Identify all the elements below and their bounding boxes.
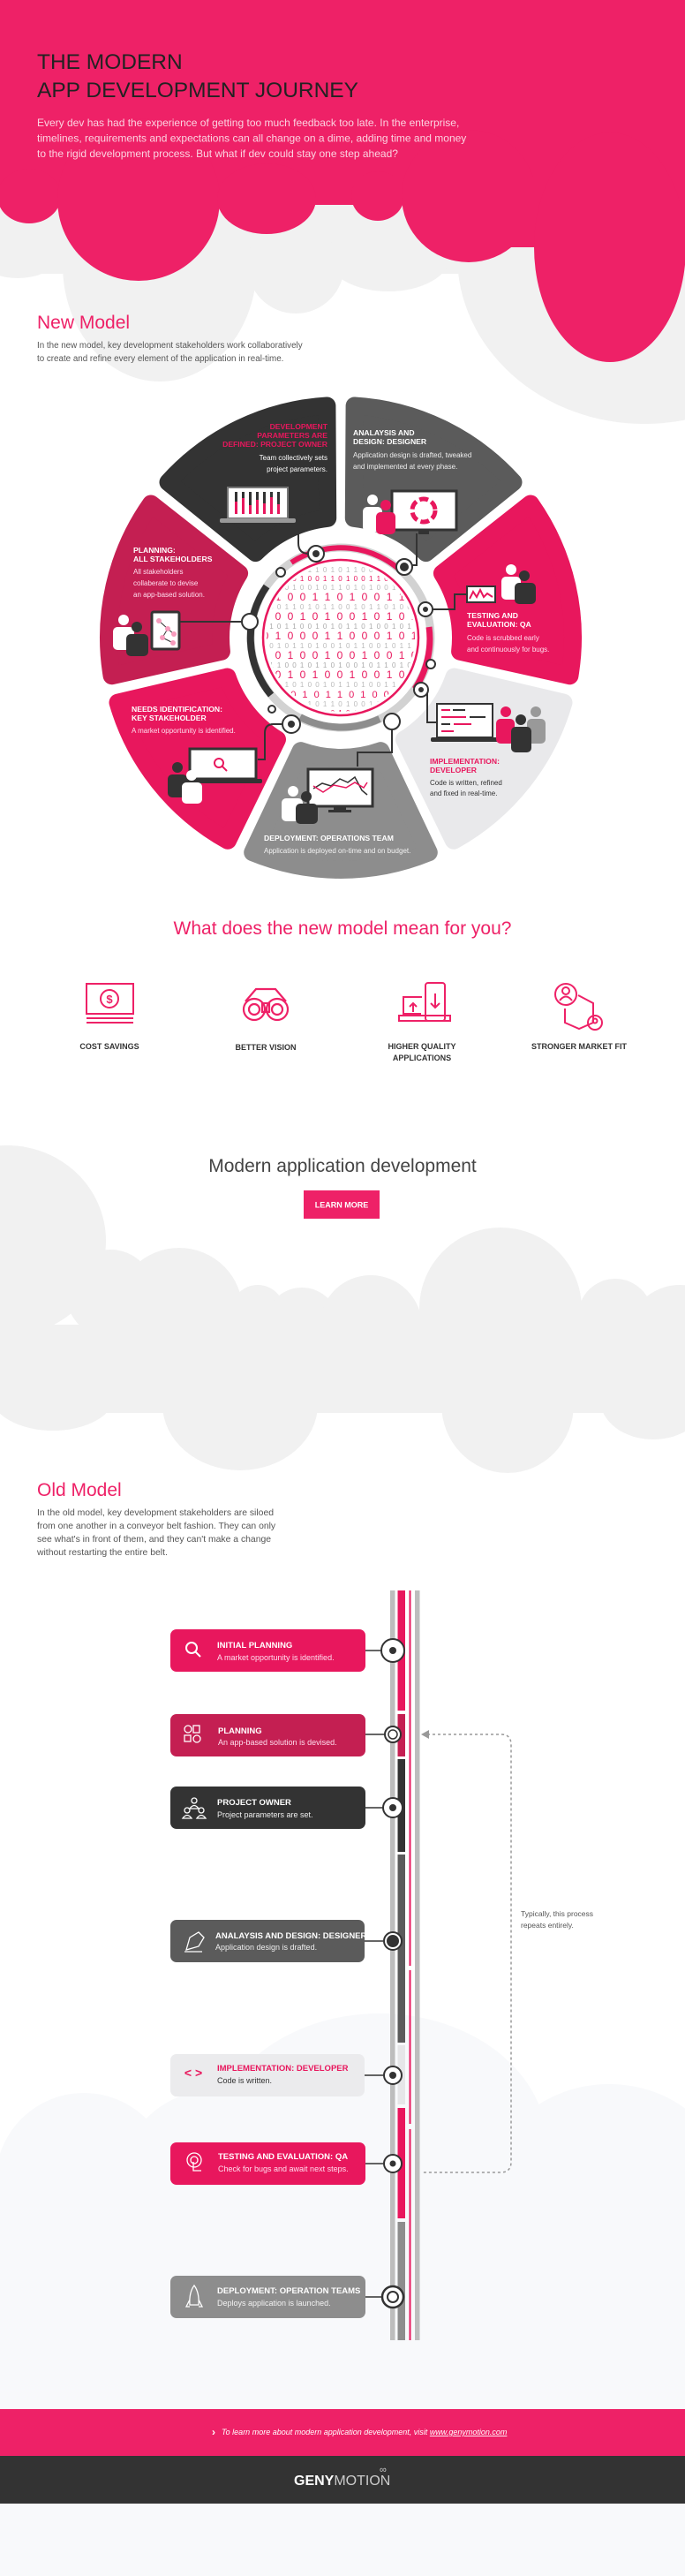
text: deployment: DEPLOYMENT: OPERATIONS TEAM (264, 834, 394, 842)
text: needs identification: NEEDS IDENTIFICATION: (132, 705, 222, 714)
label: stronger market fit: STRONGER MARKET FIT (531, 1042, 627, 1051)
text: project owner: Team collectively sets (260, 454, 327, 462)
text: testing: TESTING AND (467, 611, 518, 620)
heading: Old Model: Old Model (37, 1480, 122, 1500)
text: designer (353, 428, 471, 471)
text: testing: Code is scrubbed early (467, 634, 539, 642)
segment: implementation (404, 676, 563, 841)
card: project owner: Project parameters are set. (217, 1810, 313, 1819)
central binary circle: 1 0 0 1 0 1 1 0 1 0 0 1 0 (267, 690, 414, 700)
title: THE MODERN (37, 50, 183, 74)
label: higher quality applications (388, 1042, 456, 1062)
footer: learn more band (0, 2409, 685, 2456)
text: planning: All stakeholders (133, 568, 183, 576)
footer: genymotion logo band: ∞ (380, 2465, 387, 2475)
text: testing (467, 611, 549, 653)
central binary circle: 1 1 0 1 0 0 1 0 1 1 0 1 0 1 0 0 1 1 0 (269, 584, 412, 592)
card: deployment: DEPLOYMENT: OPERATION TEAMS (217, 2286, 360, 2296)
text: old model description: see what's in front of them, and they can't make a change (37, 1535, 271, 1545)
text: implementation: and fixed in real-time. (430, 789, 497, 797)
footer: learn more band: To learn more about modern application development, visit www.genymotion.com (222, 2428, 508, 2436)
icon: laptop with bars (220, 487, 296, 523)
card: implementation: < > (184, 2066, 202, 2080)
text: testing: EVALUATION: QA (467, 620, 531, 629)
heading: modern application development: Modern application development (208, 1156, 477, 1176)
button: learn more: LEARN MORE (315, 1201, 368, 1210)
text: implementation (430, 757, 502, 797)
card: initial planning: INITIAL PLANNING (217, 1641, 292, 1651)
central binary circle: 0 0 1 0 1 0 0 1 0 0 1 0 1 (263, 669, 418, 681)
card: testing and evaluation: TESTING AND EVALUATION: QA (218, 2152, 348, 2162)
text: old model description (36, 1508, 276, 1558)
text: old model description: In the old model, key development stakeholders are siloed (37, 1508, 274, 1518)
central binary circle: 0 1 0 0 0 1 1 0 0 0 1 0 1 (263, 630, 418, 642)
card: planning: PLANNING (218, 1726, 262, 1736)
card: planning (170, 1714, 401, 1756)
text: new model description: to create and refine every element of the application in real-time. (37, 354, 283, 364)
icon: implementation laptop and people (431, 704, 546, 752)
segment: needs identification (118, 676, 277, 841)
text: project owner: project parameters. (267, 465, 327, 473)
heading: New Model: New Model (37, 313, 130, 333)
central binary circle: 1 0 1 0 0 1 1 0 1 0 1 1 0 0 1 0 1 0 1 (269, 566, 412, 574)
card: deployment (170, 2276, 403, 2318)
intro paragraph (37, 117, 466, 160)
text: designer: and implemented at every phase. (353, 463, 457, 471)
icon: testing people and monitor (467, 564, 536, 604)
card: implementation (170, 2054, 402, 2096)
text: implementation: DEVELOPER (430, 766, 478, 774)
background: middle gray clouds (0, 1145, 685, 1473)
segment: planning (109, 503, 239, 676)
text: designer: Application design is drafted, tweaked (353, 451, 471, 459)
central binary circle: 1 1 0 0 1 0 1 1 0 1 0 0 1 0 1 1 0 1 0 (269, 661, 412, 669)
text: deployment (264, 834, 410, 855)
segment: testing (442, 503, 573, 676)
icon: cost savings (87, 984, 133, 1023)
card: planning: An app-based solution is devised. (218, 1738, 337, 1747)
card: implementation: Code is written. (217, 2076, 272, 2085)
card: analysis and design (170, 1920, 402, 1962)
connectors and nodes (180, 515, 467, 767)
icon: deployment monitor and people (282, 769, 373, 824)
text: repeat note: repeats entirely. (521, 1921, 574, 1930)
central binary circle: 0 1 0 1 1 0 1 0 0 1 0 1 1 0 0 1 0 1 1 (269, 642, 412, 650)
text: designer: DESIGN: DESIGNER (353, 437, 427, 446)
card: initial planning: A market opportunity is identified. (217, 1653, 335, 1662)
text: planning: PLANNING: (133, 546, 176, 555)
text: designer: ANALAYSIS AND (353, 428, 415, 437)
intro paragraph: Every dev has had the experience of getting too much feedback too late. In the enterprise, (37, 117, 459, 129)
button: learn more (304, 1190, 380, 1219)
arrow: dashed repeat loop (421, 1730, 511, 2172)
text: implementation: IMPLEMENTATION: (430, 757, 500, 766)
text: testing: and continuously for bugs. (467, 646, 549, 653)
background: header gray clouds (0, 88, 685, 424)
card: deployment: Deploys application is launched. (217, 2299, 331, 2308)
card: project owner (170, 1787, 403, 1829)
central binary circle: 1 0 1 0 0 1 0 1 1 0 1 0 0 1 0 1 0 1 1 (269, 700, 412, 708)
icon: stronger market fit (555, 984, 602, 1030)
text: repeat note: Typically, this process (521, 1909, 593, 1918)
conveyor rail (390, 1590, 420, 2340)
text: needs identification: KEY STAKEHOLDER (132, 714, 207, 722)
text: project owner: DEVELOPMENT (270, 422, 328, 431)
icon: designer people and monitor (363, 491, 456, 534)
card: initial planning (170, 1629, 404, 1672)
intro paragraph: timelines, requirements and expectations can all change on a dime, adding time and money (37, 132, 466, 145)
central binary circle: 0 1 1 0 1 0 0 1 0 1 1 0 1 0 0 1 1 0 1 (269, 681, 412, 689)
text: planning: an app-based solution. (133, 591, 205, 599)
footer: learn more band: › (212, 2426, 215, 2438)
text: needs identification (132, 705, 236, 735)
label: higher quality applications: HIGHER QUALITY (388, 1042, 456, 1051)
title (37, 50, 358, 102)
icon: higher quality apps (399, 983, 450, 1021)
central binary circle: 1 0 1 1 0 0 1 0 1 0 1 1 0 1 0 0 1 0 1 (269, 623, 412, 631)
text: project owner (222, 422, 328, 473)
central binary circle: 0 0 1 1 0 1 0 1 1 0 0 1 0 1 1 0 1 0 0 (269, 603, 412, 611)
heading: what does the new model mean: What does the new model mean for you? (174, 918, 511, 939)
label: better vision: BETTER VISION (235, 1043, 297, 1052)
text: planning: collaberate to devise (133, 579, 199, 587)
footer: genymotion logo band: GENYMOTION (294, 2474, 390, 2489)
segment: designer (354, 406, 514, 553)
icon: planning people and tablet (113, 612, 179, 656)
intro paragraph: to the rigid development process. But what if dev could stay one step ahead? (37, 147, 398, 160)
icon: binoculars (244, 989, 288, 1020)
text: new model description: In the new model, key development stakeholders work collaboratively (37, 341, 303, 351)
card: testing and evaluation: Check for bugs and await next steps. (218, 2164, 349, 2173)
background: lower faint clouds (0, 2013, 685, 2576)
card: analysis and design: ANALAYSIS AND DESIGN: DESIGNER (215, 1931, 367, 1941)
segment: deployment (252, 751, 429, 870)
title: APP DEVELOPMENT JOURNEY (37, 79, 358, 102)
icon: needs laptop and people (168, 749, 262, 804)
segment: project owner (168, 406, 327, 553)
central binary circle: 0 1 0 0 1 1 0 1 0 0 1 1 0 (263, 591, 418, 603)
text: planning: ALL STAKEHOLDERS (133, 555, 213, 563)
text: project owner: PARAMETERS ARE (257, 431, 327, 440)
text: repeat note (521, 1909, 593, 1930)
central binary circle (245, 542, 436, 733)
card: project owner: PROJECT OWNER (217, 1798, 291, 1808)
text: implementation: Code is written, refined (430, 779, 502, 787)
central binary circle: 1 0 1 0 0 1 0 0 1 0 0 1 0 (263, 649, 418, 661)
wheel diagram (109, 406, 573, 870)
central binary circle: 1 0 0 1 0 1 0 0 1 0 1 0 1 (263, 610, 418, 623)
card: analysis and design: Application design is drafted. (215, 1943, 317, 1952)
text: old model description: from one another in a conveyor belt fashion. They can only (37, 1522, 276, 1531)
text: old model description: without restarting the entire belt. (36, 1548, 168, 1558)
footer: genymotion logo band (0, 2456, 685, 2504)
text: planning (133, 546, 213, 599)
header pink cloud (0, 0, 685, 362)
card: testing and evaluation (170, 2142, 402, 2185)
card: implementation: IMPLEMENTATION: DEVELOPER (217, 2064, 349, 2074)
text: project owner: DEFINED: PROJECT OWNER (222, 440, 328, 449)
label: higher quality applications: APPLICATIONS (393, 1054, 451, 1062)
icon: cost savings: $ (106, 993, 113, 1006)
label: cost savings: COST SAVINGS (79, 1042, 139, 1051)
text: new model description (37, 341, 303, 364)
text: needs identification: A market opportunity is identified. (132, 727, 236, 735)
benefits icons row (79, 983, 627, 1062)
central binary circle: 0 1 0 1 1 0 1 0 0 1 0 1 1 0 1 0 0 1 0 (269, 709, 412, 717)
central binary circle: 0 1 1 0 1 0 0 1 1 0 1 0 0 1 1 0 1 0 1 (269, 575, 412, 583)
text: deployment: Application is deployed on-time and on budget. (264, 847, 410, 855)
